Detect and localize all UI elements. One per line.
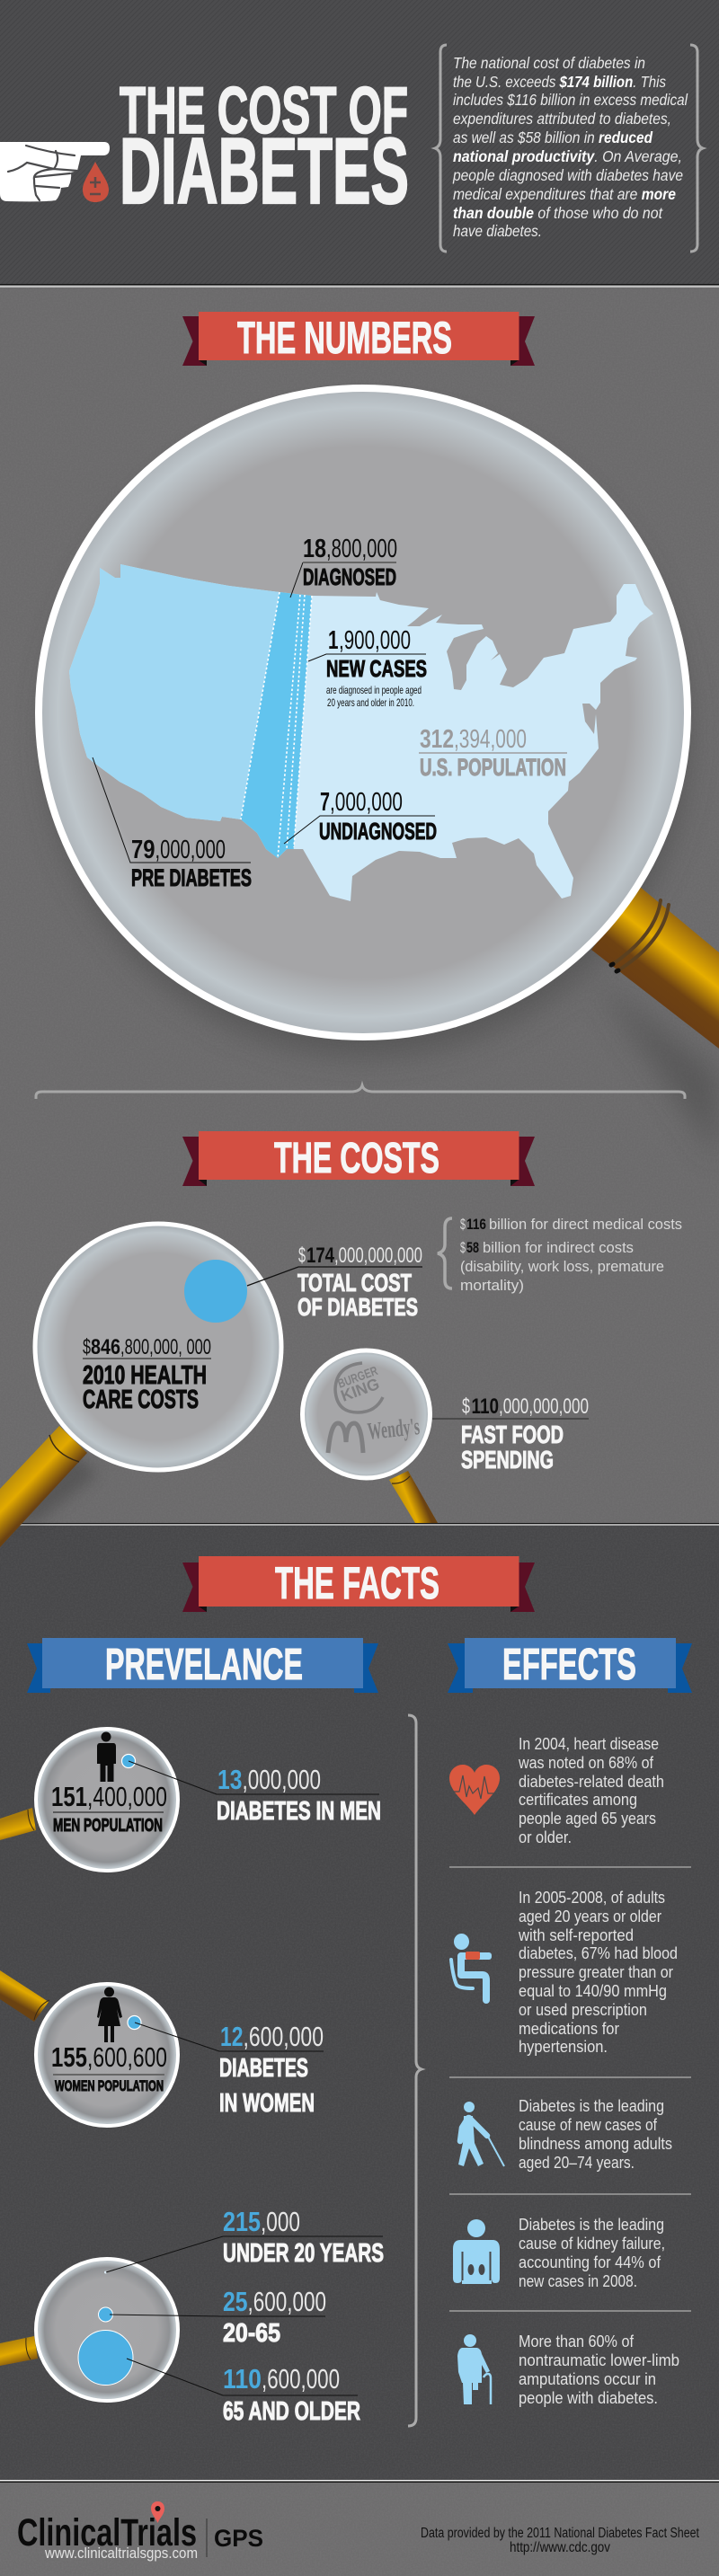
footer source: http://www.cdc.gov xyxy=(510,2540,610,2555)
label: 65 and older: ,600,000 xyxy=(262,2363,340,2395)
effect: blood pressure xyxy=(451,1889,678,2056)
label: diagnosed xyxy=(290,535,397,598)
label: 20-65: ,600,000 xyxy=(248,2286,326,2317)
label: 65 and older xyxy=(127,2359,360,2426)
label: men population: ,400,000 xyxy=(87,1781,167,1812)
label: u.s. population: 312 xyxy=(420,725,454,754)
label: new cases xyxy=(308,626,427,709)
chart: 20-65 dot xyxy=(99,2307,113,2322)
label: total cost of diabetes xyxy=(247,1244,422,1321)
logo: burger king: KING xyxy=(339,1375,382,1405)
label: diabetes in women: ,600,000 xyxy=(243,2021,324,2052)
chart: total cost circle xyxy=(184,1260,247,1323)
label: fast food spending: 110 xyxy=(471,1394,499,1419)
effect: blindness xyxy=(458,2097,672,2172)
icon: blood drop xyxy=(83,162,109,202)
banner: prevelance: PREVELANCE xyxy=(105,1641,303,1689)
footer logo: www.clinicaltrialsgps.com xyxy=(44,2545,198,2562)
text xyxy=(518,1889,678,2056)
text: hypertension. xyxy=(519,2038,608,2056)
text block: cost breakdown xyxy=(460,1216,682,1294)
label: 20-65: 20-65 xyxy=(223,2319,280,2348)
effect: heart disease xyxy=(449,1735,664,1846)
chart: 65 and older dot xyxy=(78,2331,133,2385)
label: total cost of diabetes: $ xyxy=(298,1244,306,1268)
label: undiagnosed xyxy=(284,788,437,845)
label: u.s. population xyxy=(419,725,567,781)
text block: description: the U.S. exceeds $174 billion. This xyxy=(453,73,666,91)
label: 2010 health care costs xyxy=(83,1335,211,1414)
label: new cases: NEW CASES xyxy=(326,655,427,682)
icon: person with kidneys xyxy=(453,2219,500,2284)
icon: pointing hand xyxy=(0,142,110,201)
text: pressure greater than or xyxy=(519,1963,673,1981)
banner: the costs xyxy=(182,1131,535,1186)
label: total cost of diabetes: 174 xyxy=(306,1244,335,1268)
text block: description: national productivity. On Average, xyxy=(453,147,682,165)
label: diagnosed: 18 xyxy=(303,535,326,563)
text: with self-reported xyxy=(518,1926,634,1944)
brace: cost breakdown xyxy=(438,1218,452,1288)
panel: header background xyxy=(0,0,719,285)
text: blindness among adults xyxy=(519,2135,672,2153)
logo: burger king xyxy=(335,1363,383,1412)
label: under 20 years: 215 xyxy=(223,2206,261,2237)
text: Diabetes is the leading xyxy=(519,2097,664,2115)
text: nontraumatic lower-limb xyxy=(519,2351,679,2369)
label: women population: 155 xyxy=(51,2041,87,2073)
label: new cases: 1 xyxy=(328,626,338,655)
text: accounting for 44% of xyxy=(519,2253,661,2271)
logo: arches xyxy=(328,1423,363,1453)
text: medications for xyxy=(519,2020,619,2038)
panel: facts background xyxy=(0,1525,719,2481)
title xyxy=(120,75,409,224)
text: equal to 140/90 mmHg xyxy=(519,1982,667,2000)
icon: woman xyxy=(97,1987,122,2042)
shadow: big magnifier xyxy=(45,413,719,1159)
label: new cases: 20 years and older in 2010. xyxy=(327,696,414,709)
footer logo: GPS xyxy=(214,2525,263,2552)
text: was noted on 68% of xyxy=(518,1754,654,1772)
label: diabetes in women: 12 xyxy=(220,2021,243,2052)
text xyxy=(519,2097,672,2172)
map: united states xyxy=(69,564,653,901)
label: under 20 years: UNDER 20 YEARS xyxy=(223,2239,384,2268)
footer logo xyxy=(17,2501,263,2562)
text xyxy=(519,2216,665,2290)
text block: description: The national cost of diabetes in xyxy=(453,54,645,72)
label: women population: WOMEN POPULATION xyxy=(55,2077,164,2094)
panel: footer background xyxy=(0,2483,719,2576)
text block: cost breakdown: $ xyxy=(460,1239,466,1256)
text block: description: as well as $58 billion in reduced xyxy=(453,128,652,146)
label: undiagnosed: UNDIAGNOSED xyxy=(319,818,437,845)
icon: heart xyxy=(449,1765,500,1815)
text block: cost breakdown: billion for indirect costs xyxy=(483,1239,634,1256)
banner: the numbers: THE NUMBERS xyxy=(237,313,452,363)
text block: cost breakdown: $ xyxy=(460,1216,466,1233)
label: 20-65 xyxy=(110,2286,326,2348)
text: amputations occur in xyxy=(519,2370,656,2388)
label: men population: MEN POPULATION xyxy=(53,1816,163,1836)
text block: description xyxy=(452,54,688,240)
text block: cost breakdown: 58 xyxy=(466,1239,479,1256)
text block: cost breakdown: billion for direct medical costs xyxy=(489,1216,682,1233)
label: fast food spending xyxy=(432,1394,589,1474)
label: under 20 years xyxy=(106,2206,384,2272)
banner: effects: EFFECTS xyxy=(502,1641,636,1689)
text: certificates among xyxy=(519,1791,637,1809)
logo: burger king: BURGER xyxy=(336,1363,379,1391)
magnifier: men population xyxy=(0,1729,178,1871)
text block: description: includes $116 billion in excess medical xyxy=(453,91,688,109)
label: women population xyxy=(51,2041,167,2094)
label: total cost of diabetes: ,000,000,000 xyxy=(334,1244,422,1268)
logo: wendys: Wendy's xyxy=(366,1412,421,1445)
icon: person with cane xyxy=(458,2102,504,2166)
text: diabetes, 67% had blood xyxy=(519,1944,678,1962)
label: fast food spending: SPENDING xyxy=(461,1446,554,1474)
magnifier lens: big xyxy=(39,388,688,1037)
label: men population: 151 xyxy=(51,1781,87,1812)
label: undiagnosed: 7 xyxy=(320,788,330,817)
text: aged 20 years or older xyxy=(519,1908,661,1925)
text: In 2004, heart disease xyxy=(519,1735,659,1753)
title: DIABETES xyxy=(120,120,409,224)
effect: amputation xyxy=(457,2333,679,2407)
text block: description: have diabetes. xyxy=(453,222,542,240)
chart: men with diabetes dot xyxy=(122,1754,135,1768)
header block xyxy=(0,45,703,252)
icon: seated person xyxy=(451,1934,492,2000)
text block: description: expenditures attributed to diabetes, xyxy=(453,110,671,128)
magnifier: women population xyxy=(0,1970,178,2126)
label: undiagnosed: ,000,000 xyxy=(330,788,403,817)
label: diabetes in men xyxy=(129,1761,381,1826)
label: 2010 health care costs: ,800,000, 000 xyxy=(120,1335,211,1359)
text: cause of new cases of xyxy=(519,2116,658,2134)
magnifier: fast food xyxy=(302,1350,438,1523)
label: diabetes in men: ,000,000 xyxy=(243,1764,321,1795)
label: pre diabetes: ,000,000 xyxy=(155,836,226,864)
label: 65 and older: 110 xyxy=(223,2363,262,2395)
label: 2010 health care costs: CARE COSTS xyxy=(83,1385,199,1414)
text: people aged 65 years xyxy=(519,1810,656,1828)
label: u.s. population: ,394,000 xyxy=(454,725,527,754)
label: total cost of diabetes: TOTAL COST xyxy=(297,1269,412,1297)
footer logo: ClinicalTrials xyxy=(17,2511,197,2554)
label: under 20 years: ,000 xyxy=(261,2206,300,2237)
label: diabetes in men: DIABETES IN MEN xyxy=(217,1797,381,1826)
banner: the costs: THE COSTS xyxy=(274,1135,439,1182)
text block: cost breakdown: mortality) xyxy=(460,1277,524,1294)
text: In 2005-2008, of adults xyxy=(519,1889,665,1907)
label: new cases: are diagnosed in people aged xyxy=(326,684,422,696)
effect: kidney failure xyxy=(453,2216,665,2290)
text: diabetes-related death xyxy=(519,1773,664,1791)
chart: women with diabetes dot xyxy=(128,2016,141,2029)
label: diagnosed: DIAGNOSED xyxy=(303,563,396,590)
title: THE COST OF xyxy=(120,75,408,147)
text block: description: than double of those who do not xyxy=(453,204,663,222)
label: pre diabetes: 79 xyxy=(131,836,155,864)
banner: the facts: THE FACTS xyxy=(275,1558,439,1608)
text xyxy=(519,2333,679,2407)
label: u.s. population: U.S. POPULATION xyxy=(420,754,566,781)
brace: effects column xyxy=(408,1715,422,2426)
label: diabetes in women: IN WOMEN xyxy=(219,2089,315,2118)
text block: description: people diagnosed with diabetes have xyxy=(452,166,683,184)
brace: description xyxy=(435,45,703,252)
label: new cases: ,900,000 xyxy=(339,626,411,655)
magnifier: health care costs xyxy=(0,1224,281,1547)
label: 2010 health care costs: 846 xyxy=(91,1335,120,1359)
label: fast food spending: FAST FOOD xyxy=(461,1421,564,1448)
text: new cases in 2008. xyxy=(519,2272,637,2290)
text: people with diabetes. xyxy=(519,2389,658,2407)
icon: man xyxy=(97,1732,116,1782)
label: fast food spending: ,000,000,000 xyxy=(499,1394,589,1419)
text xyxy=(518,1735,664,1846)
text: aged 20–74 years. xyxy=(519,2154,635,2172)
label: men population xyxy=(51,1781,167,1836)
label: fast food spending: $ xyxy=(462,1394,470,1419)
label: pre diabetes xyxy=(93,757,252,891)
text block: cost breakdown: 116 xyxy=(466,1216,486,1233)
label: diabetes in women xyxy=(135,2021,324,2118)
label: diabetes in women: DIABETES xyxy=(219,2054,308,2083)
label: women population: ,600,600 xyxy=(87,2041,167,2073)
text block: description: medical expenditures that are more xyxy=(453,185,676,203)
text: Diabetes is the leading xyxy=(519,2216,664,2234)
label: 65 and older: 65 AND OLDER xyxy=(223,2397,360,2426)
magnifier handle: big xyxy=(591,887,719,1049)
text: or used prescription xyxy=(519,2001,647,2019)
panel: numbers and costs background xyxy=(0,288,719,1524)
label: pre diabetes: PRE DIABETES xyxy=(131,864,252,891)
divider brace xyxy=(36,1085,685,1099)
text block: cost breakdown: (disability, work loss, premature xyxy=(460,1258,664,1275)
text: cause of kidney failure, xyxy=(519,2235,665,2253)
label: total cost of diabetes: OF DIABETES xyxy=(297,1293,418,1321)
banner: the facts xyxy=(182,1556,535,1612)
label: 20-65: 25 xyxy=(223,2286,248,2317)
label: diagnosed: ,800,000 xyxy=(326,535,397,563)
label: diabetes in men: 13 xyxy=(217,1764,243,1795)
footer source xyxy=(421,2526,700,2555)
text: or older. xyxy=(519,1828,572,1846)
banner: effects xyxy=(448,1638,692,1693)
label: 2010 health care costs: $ xyxy=(83,1335,91,1359)
label: 2010 health care costs: 2010 HEALTH xyxy=(83,1361,207,1390)
text: More than 60% of xyxy=(519,2333,635,2350)
chart: under 20 dot xyxy=(104,2271,107,2273)
banner: prevelance xyxy=(27,1638,378,1693)
magnifier: age groups xyxy=(0,2259,178,2401)
icon: location pin xyxy=(151,2501,164,2523)
icon: amputee with cane xyxy=(457,2334,491,2404)
